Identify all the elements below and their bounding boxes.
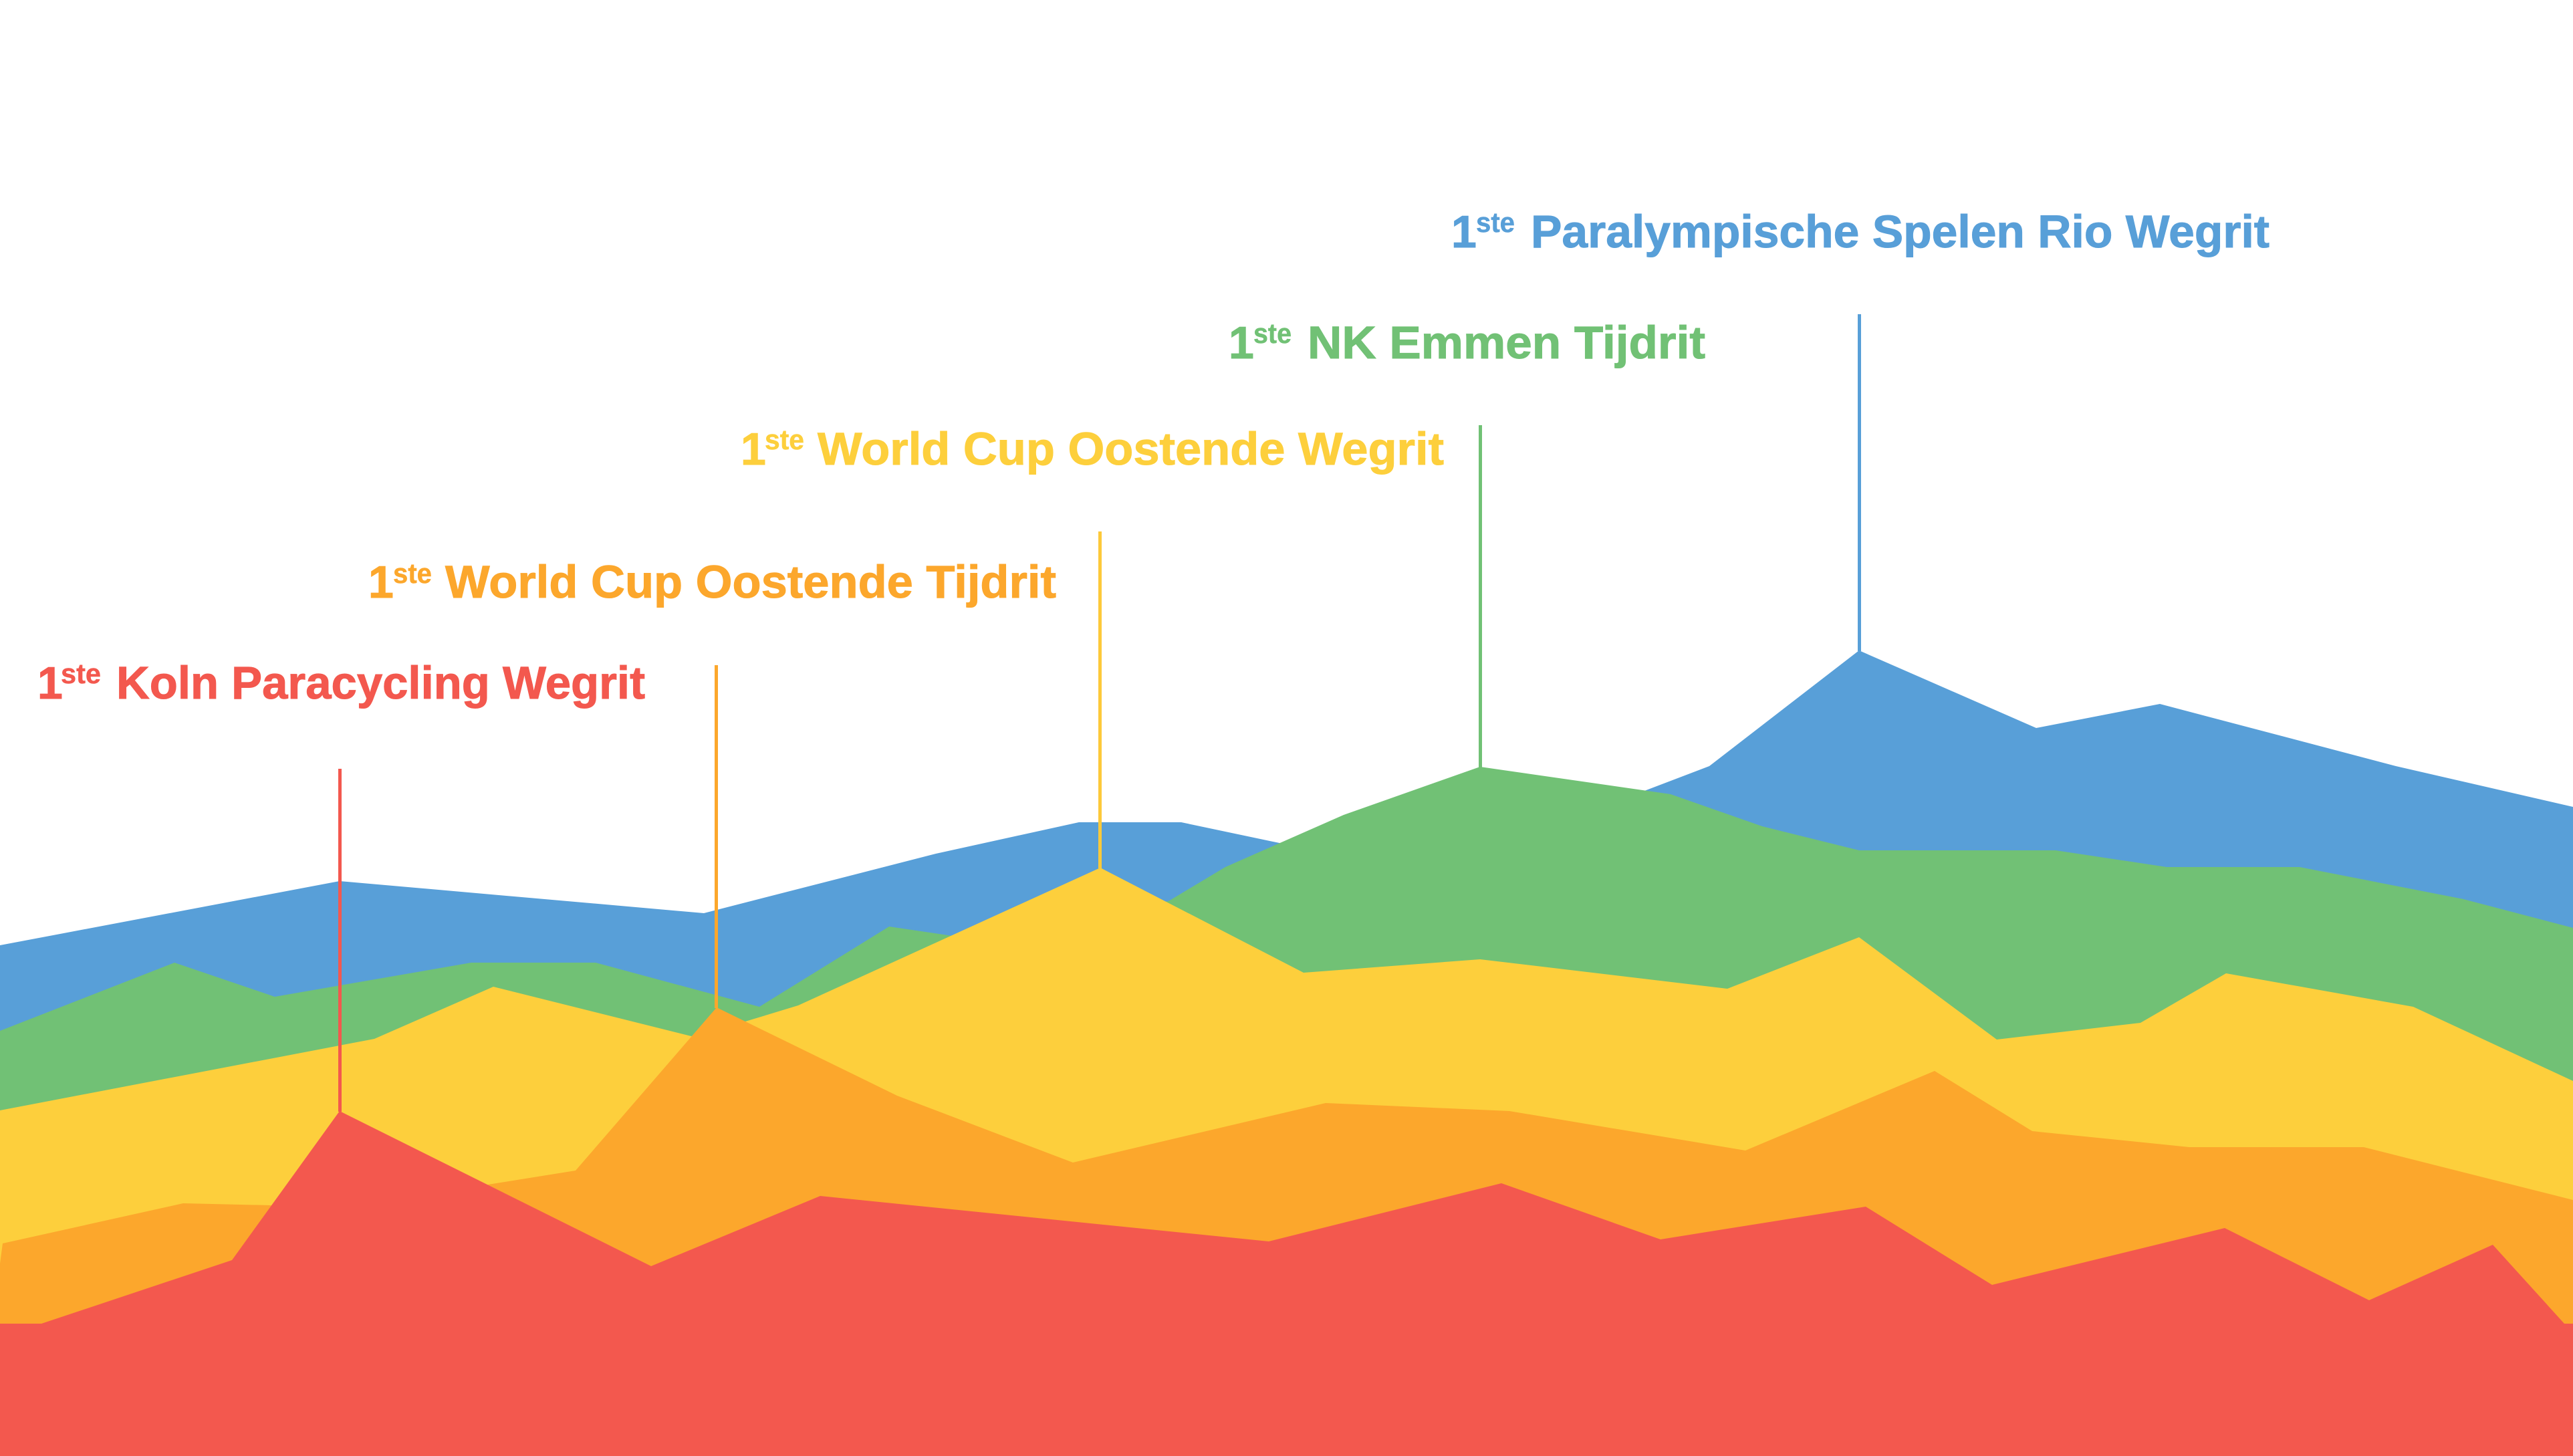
area chart: stacked layers xyxy=(0,650,2573,1456)
label: Koln Paracycling Wegrit: Koln Paracycling Wegrit xyxy=(116,657,645,709)
label: World Cup Oostende Wegrit: World Cup Oostende Wegrit xyxy=(818,423,1444,475)
marker line: blue xyxy=(1858,314,1861,651)
area: red Koln Paracycling layer xyxy=(0,1111,2573,1456)
marker line: orange xyxy=(715,665,718,1008)
label: NK Emmen Tijdrit: ste xyxy=(1253,318,1292,349)
marker line: red xyxy=(338,769,342,1112)
label: Paralympische Spelen Rio Wegrit: Paralympische Spelen Rio Wegrit xyxy=(1531,206,2270,257)
marker line: yellow xyxy=(1098,531,1102,868)
area: yellow World Cup Oostende Wegrit layer xyxy=(0,868,2573,1456)
area: orange World Cup Oostende Tijdrit layer xyxy=(0,1007,2573,1456)
marker line: green xyxy=(1479,425,1482,767)
label: World Cup Oostende Wegrit: ste xyxy=(765,424,804,455)
label: Paralympische Spelen Rio Wegrit: 1 xyxy=(1451,207,1477,257)
label: World Cup Oostende Wegrit: 1 xyxy=(741,424,766,475)
label: World Cup Oostende Tijdrit: ste xyxy=(393,558,432,589)
label: Koln Paracycling Wegrit: ste xyxy=(61,658,101,689)
label: NK Emmen Tijdrit: 1 xyxy=(1229,318,1254,368)
label: World Cup Oostende Tijdrit: World Cup Oostende Tijdrit xyxy=(445,556,1056,608)
label: Koln Paracycling Wegrit: 1 xyxy=(37,658,63,709)
label: NK Emmen Tijdrit: NK Emmen Tijdrit xyxy=(1308,317,1705,368)
area: blue Paralympische Spelen Rio layer xyxy=(0,650,2573,1456)
area: green NK Emmen layer xyxy=(0,767,2573,1456)
label: Paralympische Spelen Rio Wegrit: ste xyxy=(1476,207,1515,238)
label: World Cup Oostende Tijdrit: 1 xyxy=(368,557,394,608)
